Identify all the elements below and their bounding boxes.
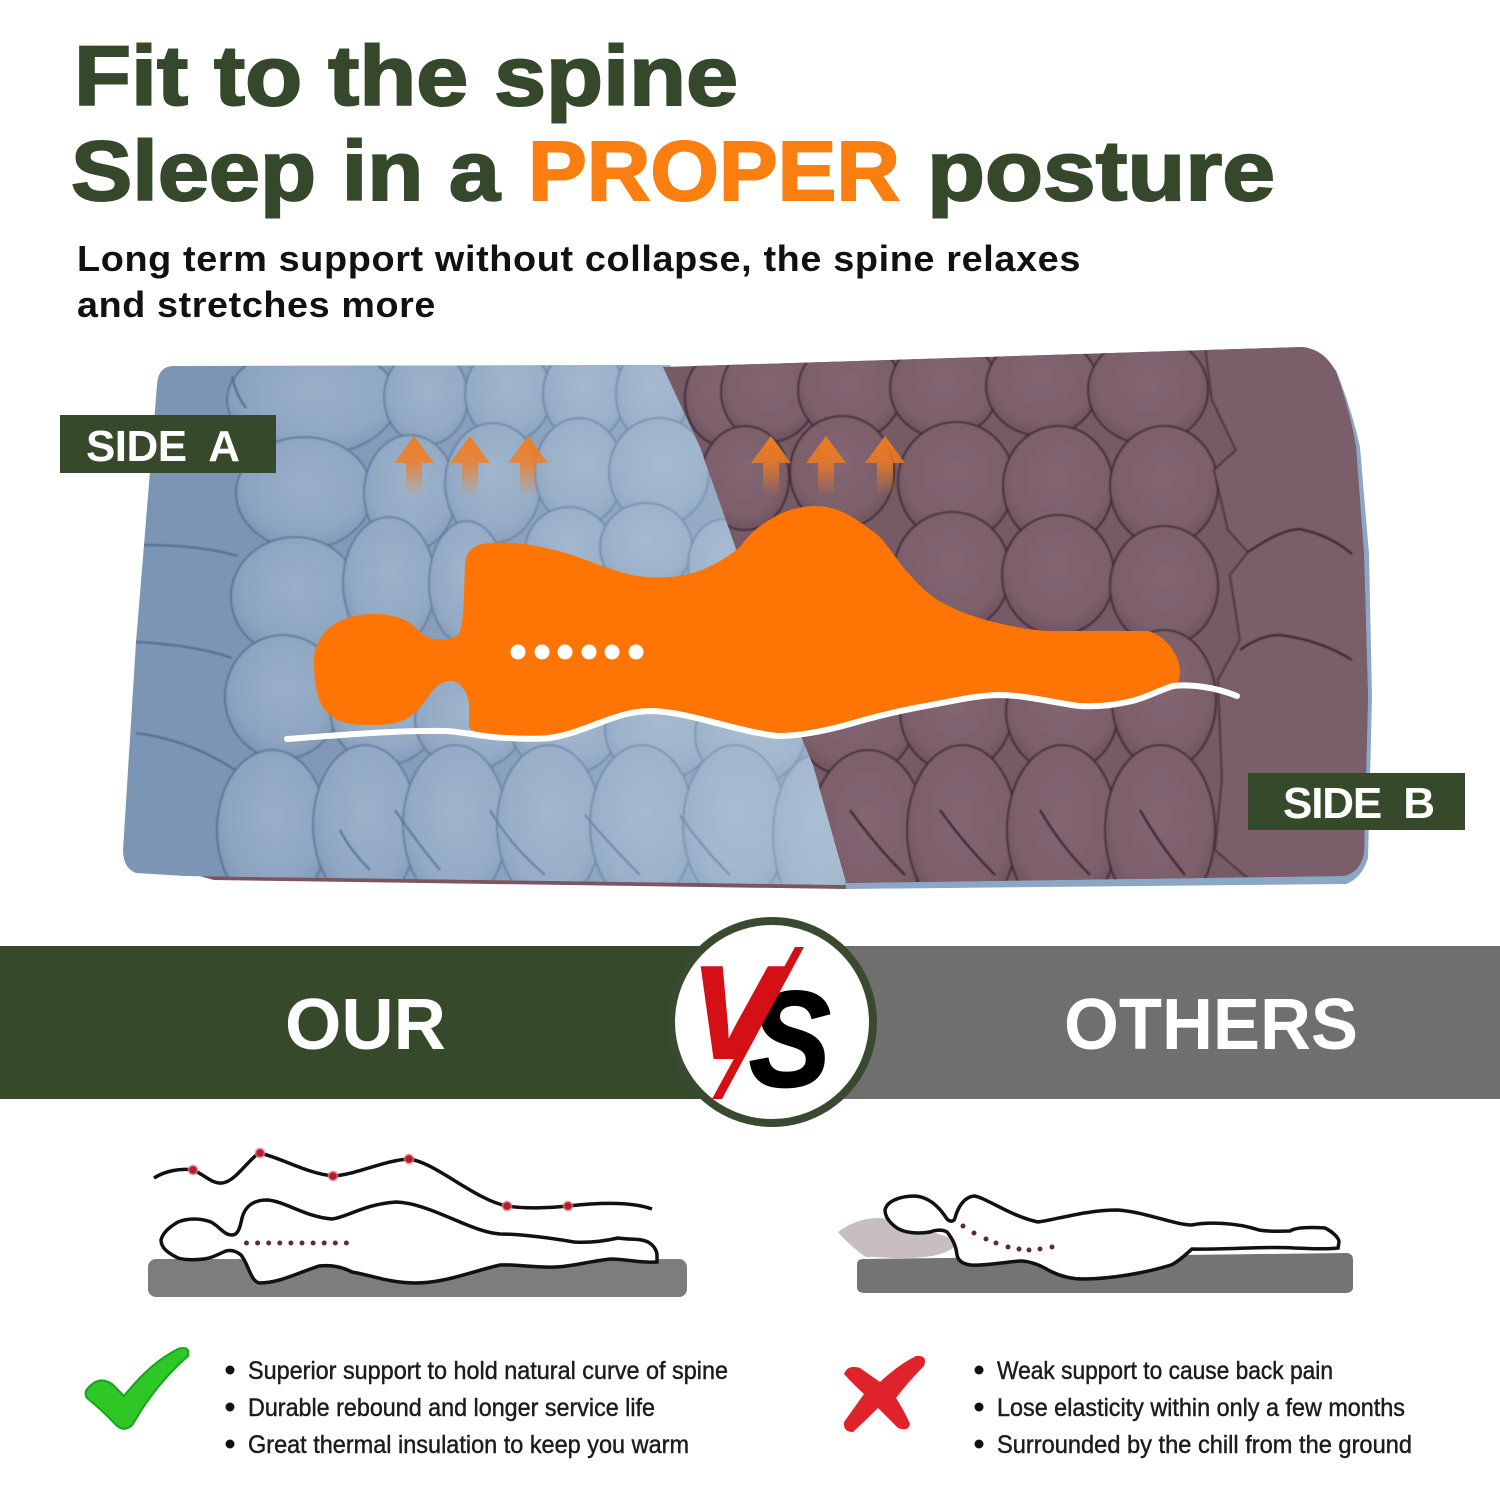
subtitle: and stretches more: [77, 284, 436, 325]
side B mauve half: [663, 347, 1368, 883]
spine dots: [510, 644, 644, 660]
quilting seams, blue side: [136, 376, 730, 875]
title: Fit to the spine: [74, 29, 738, 123]
thin edge strips of cushion: [846, 350, 1372, 889]
side A blue half: [123, 365, 846, 885]
reversible quilted cushion: [110, 336, 1380, 920]
others spine illustration: [838, 1196, 1353, 1293]
side B label: [1248, 773, 1465, 830]
white mattress contour line: [287, 685, 1237, 739]
title: PROPER: [528, 124, 900, 218]
banner right: others: [820, 946, 1500, 1099]
quilting seams, mauve side: [850, 529, 1352, 875]
others drawbacks list: [974, 1357, 1412, 1459]
spine dots: [960, 1224, 1054, 1252]
red pressure points: [188, 1148, 572, 1210]
side A label: SIDE A: [86, 422, 240, 471]
pillow: [838, 1218, 954, 1258]
our benefits list: [226, 1357, 728, 1459]
VS badge: V: [673, 940, 795, 1087]
banner left: our: [0, 946, 720, 1099]
side A label: [60, 415, 276, 473]
our benefits list: Durable rebound and longer service life: [248, 1394, 655, 1422]
subtitle: [77, 238, 1081, 325]
title: [71, 29, 1275, 218]
VS badge: [671, 921, 873, 1123]
body outline: [161, 1200, 657, 1283]
spine dots: [244, 1240, 349, 1246]
title: Sleep in a: [71, 124, 501, 218]
mattress: [857, 1253, 1353, 1293]
title: posture: [927, 124, 1275, 218]
banner right: others: OTHERS: [1064, 985, 1358, 1065]
icon: green check: [86, 1348, 188, 1429]
others drawbacks list: Weak support to cause back pain: [997, 1357, 1333, 1385]
our benefits list: Superior support to hold natural curve of spine: [248, 1357, 728, 1385]
banner left: our: OUR: [285, 985, 446, 1065]
orange heat arrows, side A: [394, 436, 548, 496]
orange body silhouette with spine dots: [314, 506, 1180, 738]
VS badge: S: [749, 964, 831, 1115]
mattress: [148, 1259, 687, 1297]
our spine illustration: [148, 1148, 687, 1297]
icon: red cross: [844, 1356, 925, 1432]
orange heat arrows, side B: [751, 436, 905, 496]
body outline: [885, 1196, 1339, 1279]
right border panel: [1205, 340, 1380, 880]
others drawbacks list: Surrounded by the chill from the ground: [997, 1431, 1412, 1459]
spine curve: [154, 1153, 652, 1209]
others drawbacks list: Lose elasticity within only a few months: [997, 1394, 1405, 1422]
comparison banner: [0, 921, 1500, 1123]
our benefits list: Great thermal insulation to keep you warm: [248, 1431, 689, 1459]
side B label: SIDE B: [1283, 779, 1435, 828]
subtitle: Long term support without collapse, the spine relaxes: [77, 238, 1081, 279]
